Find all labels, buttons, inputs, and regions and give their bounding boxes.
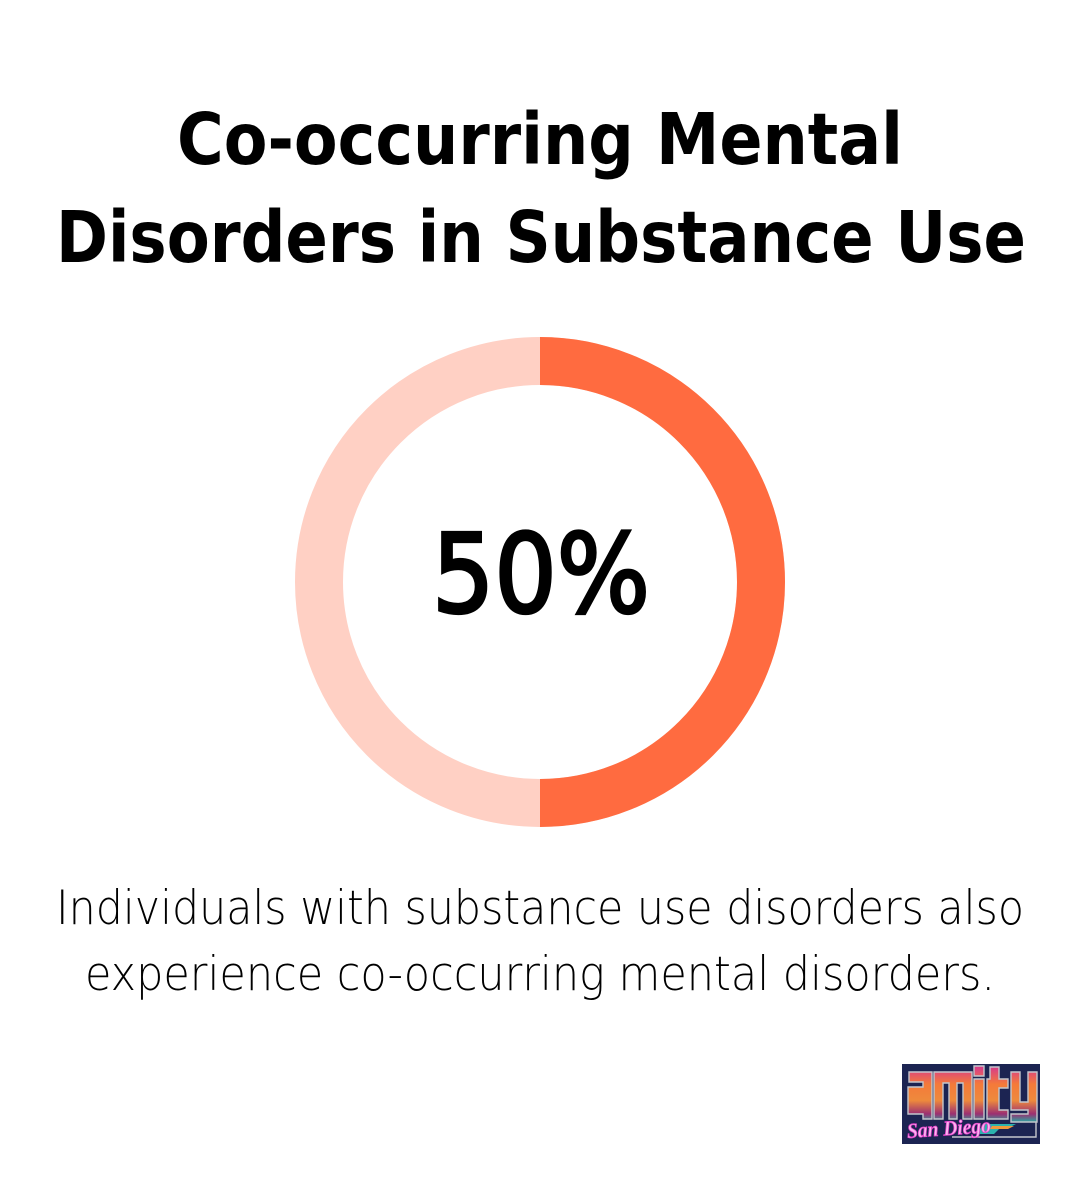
description text: experience co-occurring mental disorders. <box>85 947 995 1002</box>
title <box>56 98 1026 279</box>
description text <box>56 881 1024 1002</box>
logo: Amity San Diego <box>902 1064 1040 1144</box>
logo script: San Diego <box>906 1113 992 1143</box>
logo bottom frame <box>952 1122 1036 1137</box>
donut chart: 50% <box>319 361 761 803</box>
title: Co-occurring Mental <box>177 98 903 181</box>
value: 50%: 50% <box>432 511 650 638</box>
logo letter blocks <box>908 1066 1037 1122</box>
logo stripes <box>976 1124 1016 1134</box>
